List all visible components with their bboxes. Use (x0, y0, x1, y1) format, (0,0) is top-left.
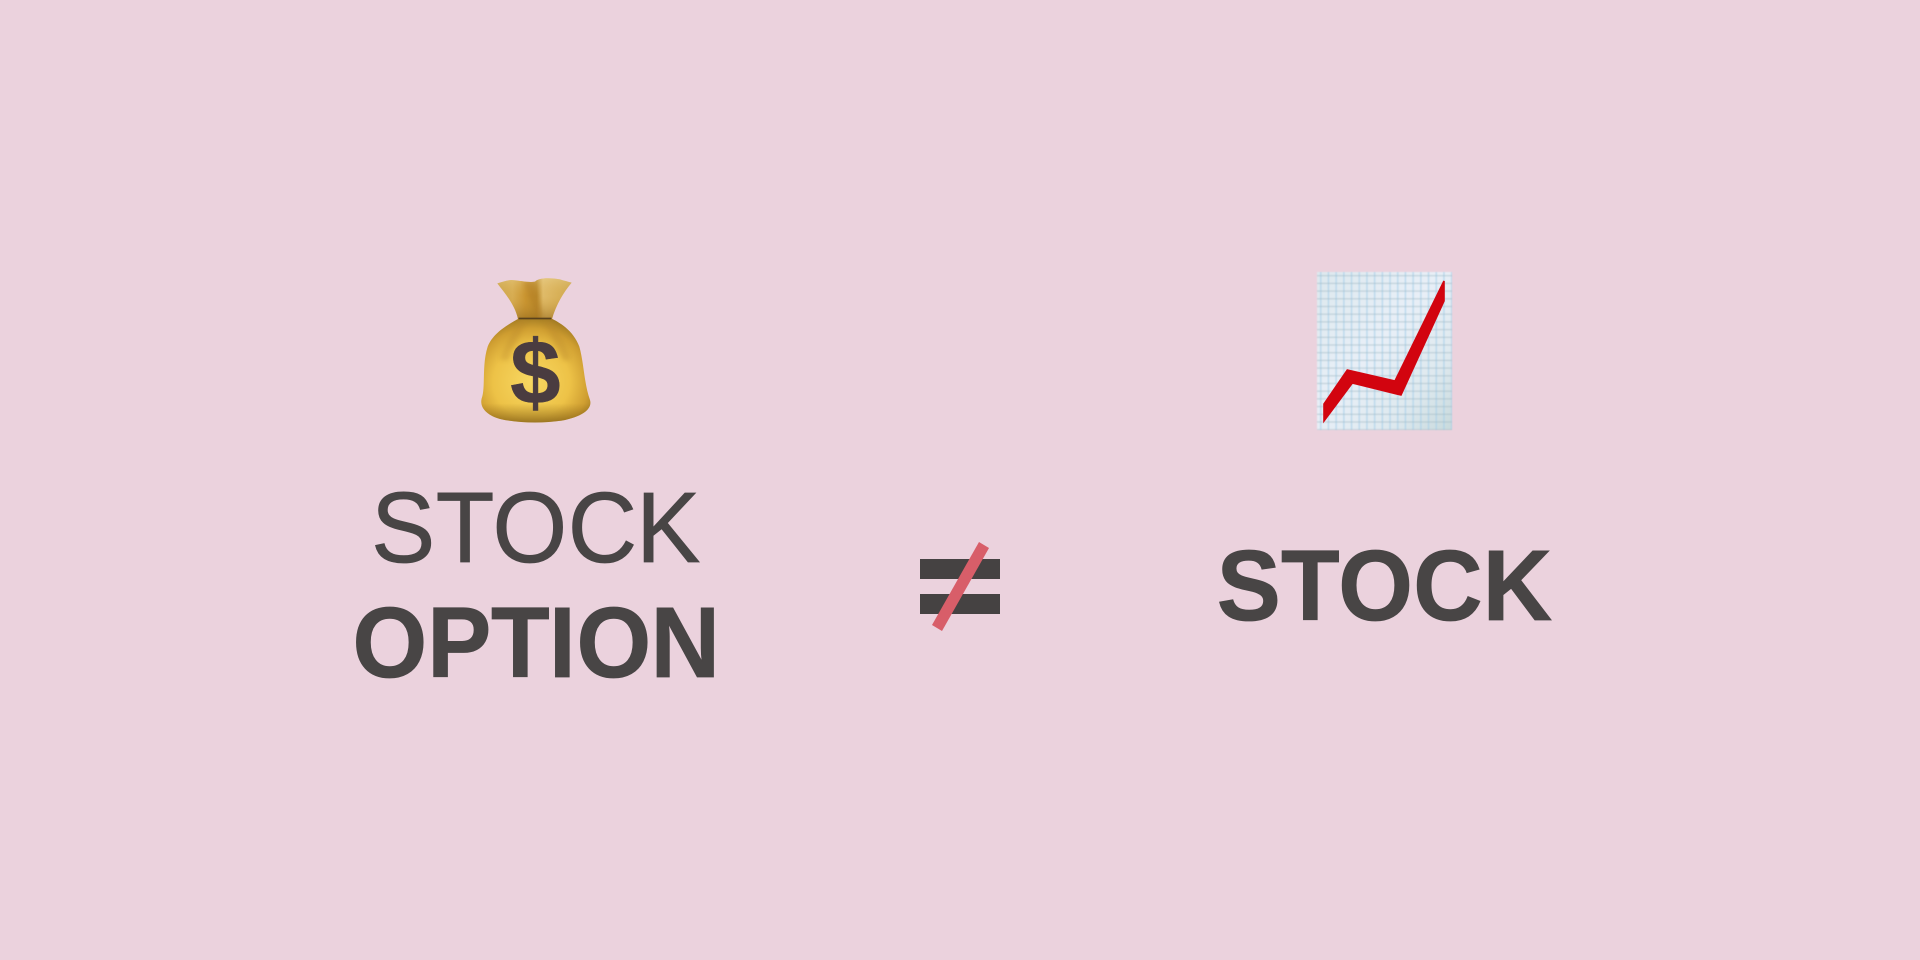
label: stock: STOCK (371, 471, 700, 583)
icon: money bag: $ (510, 322, 561, 423)
icon: money bag (477, 277, 593, 425)
label: stock: STOCK (1217, 529, 1552, 641)
heading: stock option (353, 471, 720, 698)
label: option: OPTION (353, 586, 720, 698)
icon: not equal sign (920, 542, 1000, 631)
icon: rising chart (1317, 272, 1452, 430)
